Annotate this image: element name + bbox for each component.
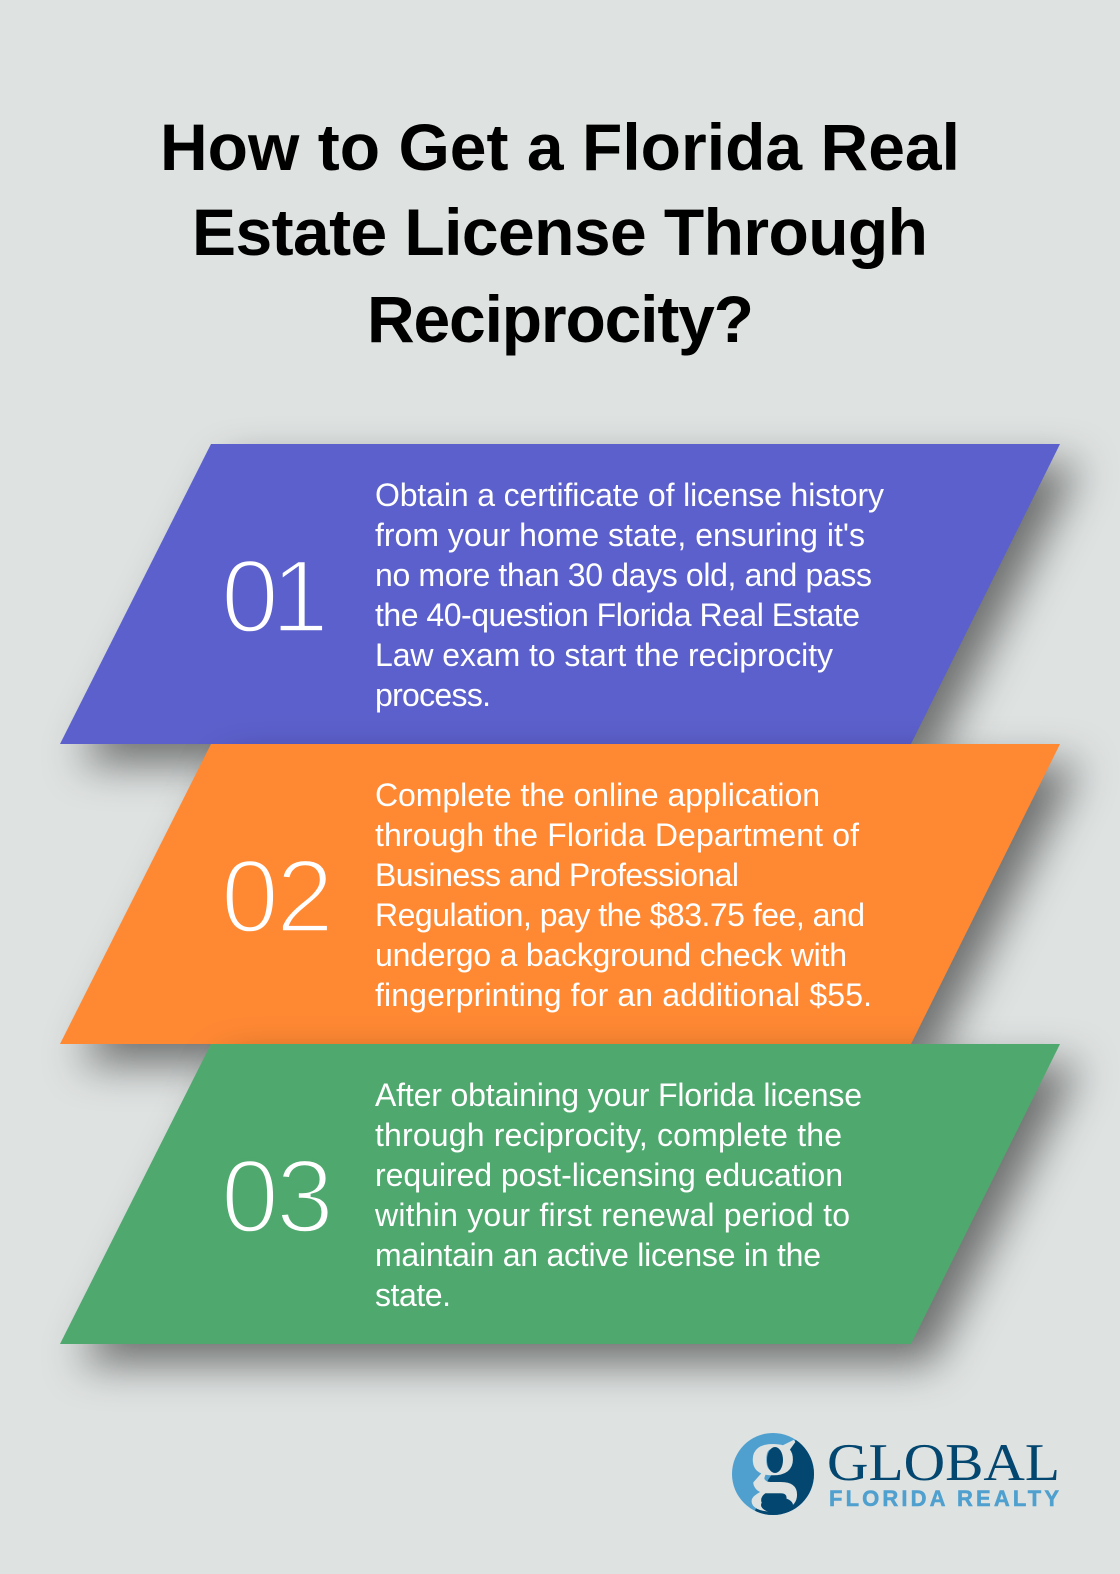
panel: step 01: 01 xyxy=(221,539,329,655)
logo: Global Florida Realty: GLOBAL xyxy=(827,1434,1060,1492)
panel: step 03: through reciprocity, complete the xyxy=(375,1117,842,1153)
logo: Global Florida Realty xyxy=(732,1433,1060,1515)
panel: step 01: Law exam to start the reciprocity xyxy=(375,637,833,673)
panel: step 03: After obtaining your Florida license xyxy=(375,1077,862,1113)
panel: step 02: 02 xyxy=(221,839,334,955)
panel: step 02: Business and Professional xyxy=(375,857,739,893)
title: Estate License Through xyxy=(192,195,928,269)
panel: step 01: no more than 30 days old, and pass xyxy=(375,557,872,593)
panel: step 03: state. xyxy=(375,1277,451,1313)
title xyxy=(160,110,960,356)
panel: step 02: Regulation, pay the $83.75 fee, and xyxy=(375,897,865,933)
panel: step 02: fingerprinting for an additional $55. xyxy=(375,977,872,1013)
panel: step 01: the 40-question Florida Real Estate xyxy=(375,597,860,633)
panel: step 02: Complete the online application xyxy=(375,777,820,813)
panel: step 03 xyxy=(60,1044,1080,1364)
panel: step 01: process. xyxy=(375,677,491,713)
title: How to Get a Florida Real xyxy=(160,110,960,184)
panel: step 02 xyxy=(60,744,1080,1064)
panel: step 03: required post-licensing education xyxy=(375,1157,843,1193)
panel: step 02: through the Florida Department of xyxy=(375,817,859,853)
panel: step 03: maintain an active license in the xyxy=(375,1237,821,1273)
panel: step 03: within your first renewal period to xyxy=(374,1197,850,1233)
panel: step 02: undergo a background check with xyxy=(375,937,847,973)
logo: Global Florida Realty: FLORIDA REALTY xyxy=(829,1486,1059,1511)
title: Reciprocity? xyxy=(367,282,754,356)
panel: step 01: Obtain a certificate of license history xyxy=(375,477,884,513)
panel: step 01: from your home state, ensuring it's xyxy=(375,517,865,553)
panel: step 03: 03 xyxy=(221,1139,334,1255)
icon: g monogram xyxy=(732,1433,814,1515)
icon: g monogram: g xyxy=(749,1404,798,1512)
panel: step 01 xyxy=(60,444,1080,764)
